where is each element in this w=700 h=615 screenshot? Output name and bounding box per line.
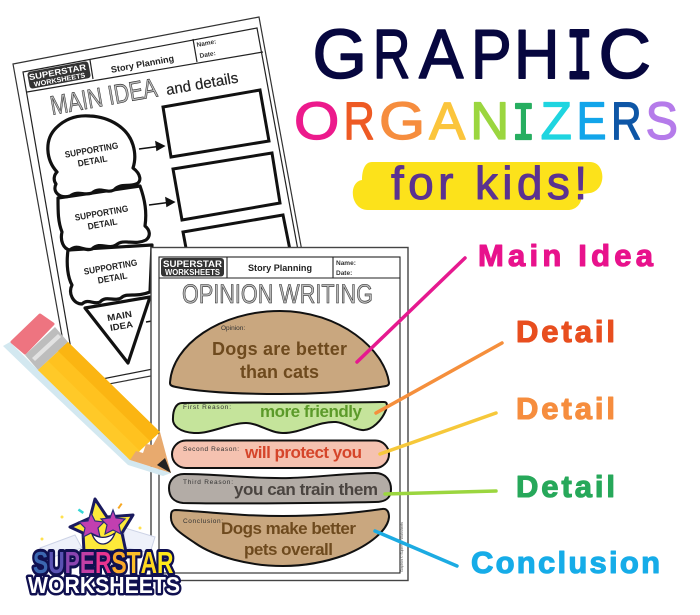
worksheet copyright note: Graphics © Superstar Worksheets: [400, 522, 404, 572]
logo wordmark: WORKSHEETS: [28, 572, 180, 598]
callout line: detail one: [376, 343, 502, 413]
worksheet header text: SUPERSTAR: [28, 62, 87, 82]
logo confetti: [40, 503, 142, 540]
logo star glasses: [79, 510, 125, 537]
heading: graphic: P: [471, 15, 512, 93]
worksheet header text: Name:: [196, 38, 217, 49]
worksheet title: main idea and details: MAIN IDEA: [48, 73, 159, 121]
scoop and cone labels: DETAIL: [87, 216, 119, 232]
highlight and subheading: for kids: for kids!: [391, 157, 587, 209]
icon: pencil: [3, 315, 171, 476]
header: name and date: Date:: [336, 270, 352, 277]
heading: graphic: G: [312, 15, 367, 93]
scoop and cone labels: [64, 140, 138, 333]
burger bottom bun: conclusion: Dogs make better: [221, 519, 356, 538]
logo star mascot: [70, 499, 133, 552]
heading: organizers: O: [294, 91, 339, 150]
worksheet header text: [27, 38, 217, 89]
burger lettuce: first reason: more friendly: [260, 402, 363, 421]
panel: opinion writing worksheet (front sheet): [151, 248, 408, 580]
burger tomato: second reason: [172, 440, 389, 468]
header: name and date: [336, 260, 356, 277]
scoop and cone labels: SUPPORTING: [74, 203, 129, 223]
label: conclusion: Conclusion: [471, 545, 660, 580]
heading: organizers: Z: [540, 92, 572, 151]
heading: graphic: R: [373, 15, 410, 94]
scoop and cone labels: SUPPORTING: [64, 140, 119, 160]
heading: organizers: [294, 91, 678, 155]
worksheet header text: WORKSHEETS: [34, 72, 86, 89]
small superstar logo: SUPERSTAR: [163, 259, 222, 270]
heading: organizers: G: [379, 91, 425, 150]
burger lettuce: first reason: First Reason:: [183, 404, 231, 411]
panel: main idea worksheet (back sheet): [13, 17, 319, 391]
small superstar logo: WORKSHEETS: [165, 268, 221, 277]
heading: graphic: [312, 15, 651, 100]
burger bottom bun: conclusion: [171, 509, 389, 566]
scoop and cone labels: DETAIL: [97, 270, 129, 286]
logo: superstar worksheets: [28, 499, 180, 598]
worksheet title: opinion writing: OPINION WRITING: [182, 279, 373, 309]
burger lettuce: first reason: [173, 402, 387, 433]
heading: graphic: H: [514, 16, 559, 94]
ice cream cone: [85, 297, 150, 363]
heading: organizers: A: [429, 92, 466, 151]
small superstar logo: [161, 258, 224, 277]
heading: graphic: A: [419, 15, 464, 93]
callout line: conclusion: [375, 531, 457, 566]
header: story planning: Story Planning: [248, 263, 312, 273]
label: detail one: Detail: [516, 314, 615, 349]
logo wordmark: SUPERSTAR: [33, 545, 174, 580]
heading: organizers: R: [344, 92, 375, 151]
callout line: detail three: [385, 491, 496, 494]
scoop 2: [58, 186, 149, 250]
worksheet header text: Date:: [199, 50, 216, 60]
arrows to boxes: [139, 142, 174, 322]
logo paper sheets: [40, 528, 155, 560]
burger top bun: opinion: [170, 311, 389, 394]
answer boxes: [163, 90, 296, 296]
heading: organizers: I: [512, 95, 535, 155]
heading: organizers: E: [576, 92, 607, 151]
scoop 1: [48, 116, 140, 197]
burger patty: third reason: you can train them: [234, 480, 378, 499]
burger tomato: second reason: Second Reason:: [183, 446, 239, 453]
burger top bun: opinion: than cats: [240, 362, 319, 382]
label: main idea: Main Idea: [478, 238, 654, 273]
scoop and cone labels: SUPPORTING: [83, 257, 138, 277]
burger bottom bun: conclusion: Conclusion:: [183, 518, 223, 525]
burger tomato: second reason: will protect you: [244, 443, 362, 462]
logo wordmark: [28, 545, 180, 598]
burger patty: third reason: Third Reason:: [183, 479, 233, 486]
burger patty: third reason: [169, 473, 391, 503]
burger bottom bun: conclusion: pets overall: [244, 540, 333, 559]
scoop and cone labels: IDEA: [109, 319, 134, 333]
scoop and cone labels: DETAIL: [77, 153, 109, 169]
callout line: detail two: [380, 413, 496, 454]
label: detail two: Detail: [516, 391, 615, 426]
callout line: main idea: [357, 258, 465, 362]
burger top bun: opinion: Opinion:: [221, 325, 245, 332]
worksheet title: main idea and details: and details: [165, 70, 240, 99]
heading: organizers: N: [470, 92, 509, 151]
scoop 3: [67, 245, 152, 304]
header: name and date: Name:: [336, 260, 356, 267]
burger top bun: opinion: Dogs are better: [212, 339, 347, 359]
heading: graphic: C: [598, 15, 651, 94]
heading: organizers: R: [611, 93, 642, 151]
logo smile: [92, 533, 115, 544]
scoop and cone labels: MAIN: [106, 309, 133, 323]
heading: organizers: S: [646, 91, 678, 150]
heading: graphic: I: [566, 18, 593, 100]
worksheet header text: Story Planning: [110, 53, 175, 75]
label: detail three: Detail: [516, 469, 615, 504]
